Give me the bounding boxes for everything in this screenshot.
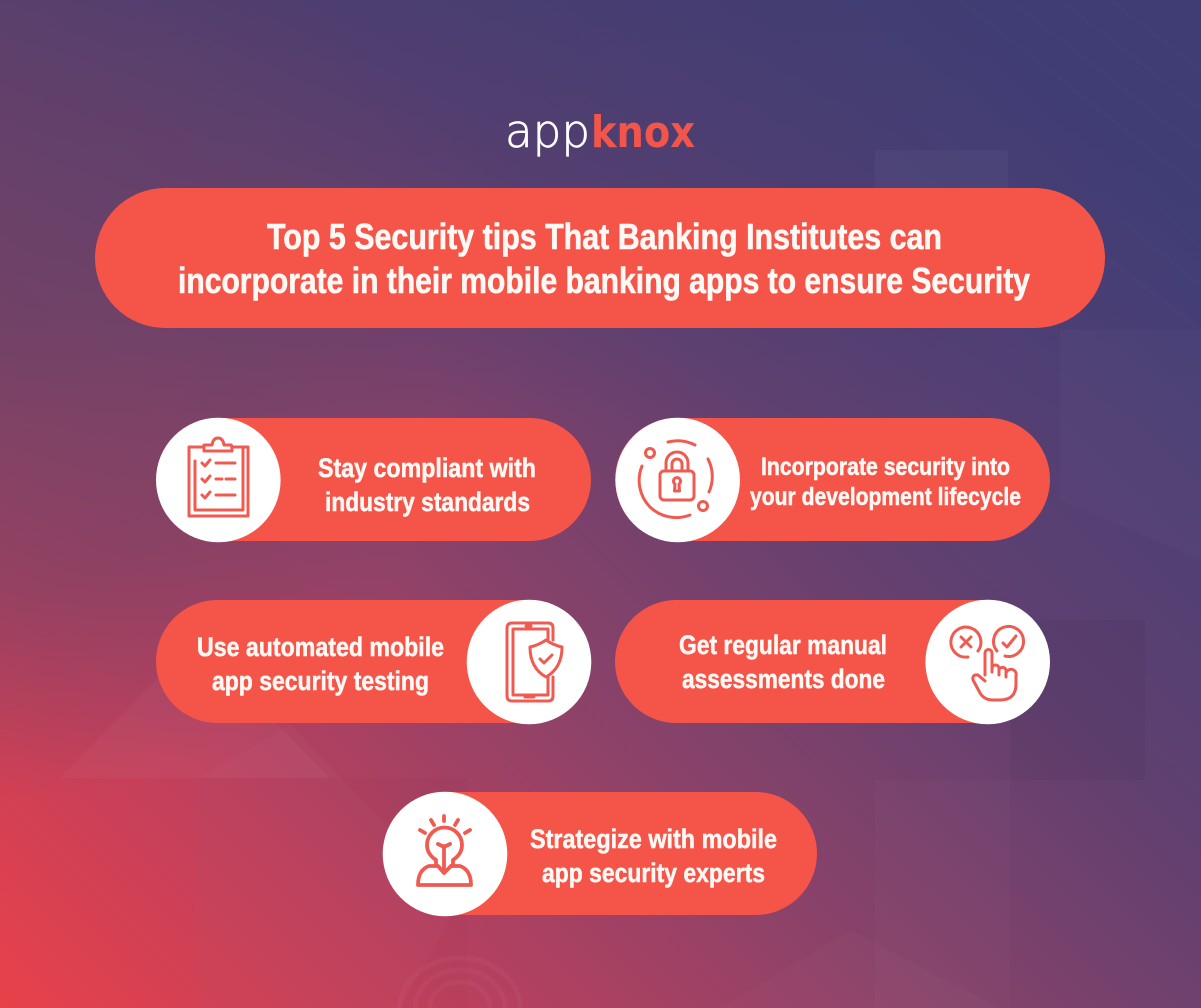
card text: industry standards xyxy=(325,487,530,517)
icon: phone with shield xyxy=(507,623,562,701)
card text: Incorporate security into xyxy=(761,453,1010,481)
card: experts xyxy=(383,792,817,916)
logo: appknox: knox xyxy=(591,107,695,158)
card text xyxy=(530,824,777,888)
card: stay compliant xyxy=(156,418,591,542)
card text: Use automated mobile xyxy=(197,632,444,662)
icon: hand choosing cross or check xyxy=(951,626,1024,700)
logo: appknox xyxy=(505,105,695,158)
icon: lightbulb head xyxy=(418,816,471,885)
card text: Get regular manual xyxy=(679,630,887,660)
card text: Strategize with mobile xyxy=(530,824,777,854)
icon: clipboard checklist xyxy=(189,438,248,516)
card: incorporate security xyxy=(615,418,1050,542)
title banner xyxy=(95,188,1105,328)
icon: padlock in ring xyxy=(639,441,712,518)
card text xyxy=(318,453,536,517)
title text xyxy=(178,216,1030,301)
card text: app security experts xyxy=(542,858,765,888)
card text xyxy=(750,453,1021,511)
title text: incorporate in their mobile banking apps to ensure Security xyxy=(178,260,1030,301)
card text: assessments done xyxy=(682,664,885,694)
card text xyxy=(679,630,887,694)
card text: your development lifecycle xyxy=(750,483,1021,511)
card text: app security testing xyxy=(212,666,429,696)
card: automated testing xyxy=(156,600,591,724)
card text xyxy=(197,632,444,696)
title text: Top 5 Security tips That Banking Institutes can xyxy=(267,216,942,257)
card: manual assessments xyxy=(615,600,1050,724)
card text: Stay compliant with xyxy=(318,453,536,483)
logo: appknox: app xyxy=(505,105,590,158)
